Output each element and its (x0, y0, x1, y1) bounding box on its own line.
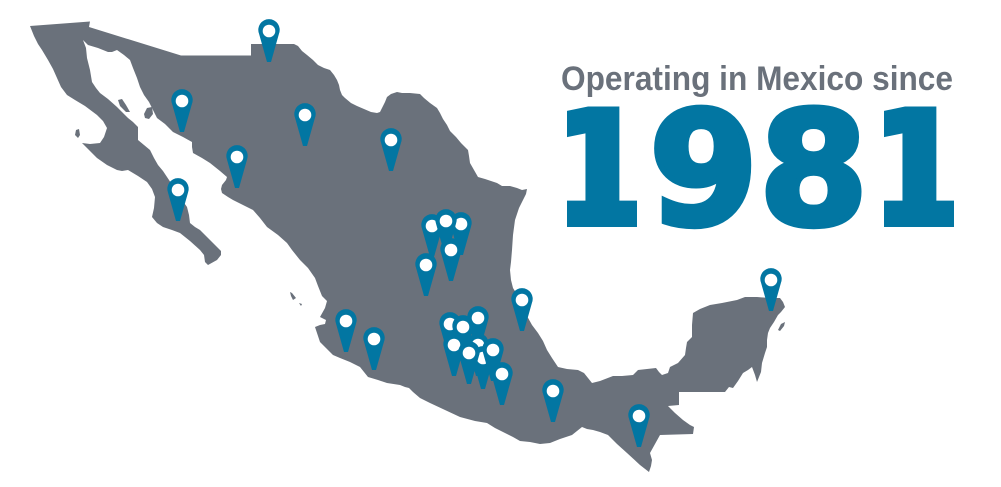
pin: Hidalgo (482, 338, 504, 381)
pin: Monterrey centre (435, 209, 457, 252)
pin: Michoacan (443, 333, 465, 376)
pin: Coahuila (380, 128, 402, 171)
pin: Veracruz (542, 379, 564, 422)
pin: Zacatecas (415, 253, 437, 296)
pin: Sonora west (171, 89, 193, 132)
big year: 1981: 1981 (544, 79, 970, 262)
pin: Jalisco east (363, 327, 385, 370)
island: Cedros (75, 129, 80, 138)
map of Mexico (30, 22, 785, 472)
pin: Mexico State (458, 341, 480, 384)
pin: Bajio centre (452, 315, 474, 358)
pin: Bajio north (467, 306, 489, 349)
pin: Queretaro (467, 333, 489, 376)
pin: Mexico City east (472, 346, 494, 389)
island: Angel de la Guarda (118, 99, 130, 112)
pin: Jalisco west (335, 309, 357, 352)
pin: Bajio west (439, 312, 461, 355)
pin: Sonora south (226, 145, 248, 188)
islands: Marias (290, 292, 302, 306)
pin: Monterrey right (450, 212, 472, 255)
heading: Operating in Mexico since: Operating in Mexico since (561, 60, 953, 98)
pin: Chiapas (628, 404, 650, 447)
landmass (30, 22, 785, 472)
pin: Baja California Sur (167, 178, 189, 221)
location pins (167, 19, 782, 447)
pin: Cancun (760, 268, 782, 311)
pin: Puebla (491, 362, 513, 405)
island: Cozumel (778, 322, 785, 331)
pin: Tamaulipas south (511, 288, 533, 331)
pin: Sonora north (258, 19, 280, 62)
pin: Chihuahua (294, 103, 316, 146)
pin: Nuevo Leon south (440, 238, 462, 281)
island: Tiburon (144, 107, 153, 119)
pin: Monterrey left (421, 214, 443, 257)
